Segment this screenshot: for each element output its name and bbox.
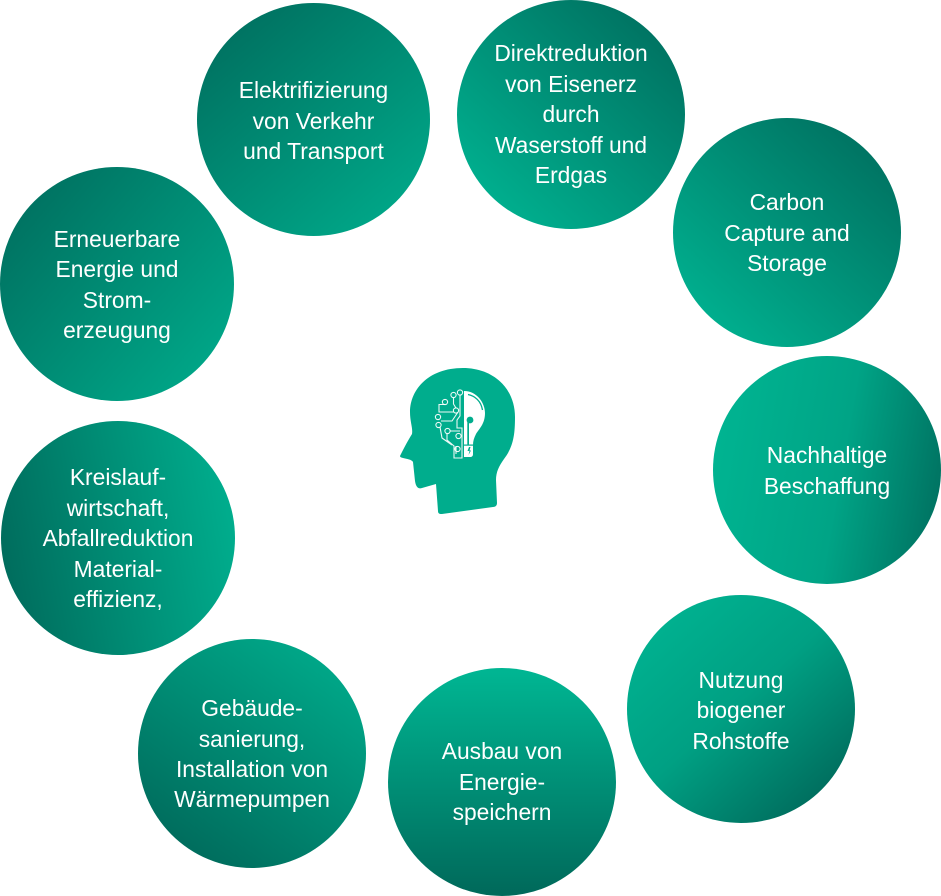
circle: Direktreduktion: durch xyxy=(542,101,600,127)
circle: Nachhaltige Beschaffung xyxy=(713,356,941,584)
circle: Gebäudesanierung: Wärmepumpen xyxy=(174,786,330,812)
circle: Erneuerbare Energie: erzeugung xyxy=(63,317,171,343)
circle: Gebäudesanierung: sanierung, xyxy=(199,726,305,752)
circle: Direktreduktion: Waserstoff und xyxy=(495,132,647,158)
head silhouette xyxy=(400,368,515,514)
circle: Ausbau von Energiespeichern: Ausbau von xyxy=(442,738,562,764)
circle: Ausbau von Energiespeichern: Energie- xyxy=(459,769,545,795)
circle: Kreislaufwirtschaft xyxy=(1,421,235,655)
circle: Elektrifizierung: und Transport xyxy=(243,138,384,164)
circle: Direktreduktion: Direktreduktion xyxy=(494,40,648,66)
circle: Elektrifizierung: von Verkehr xyxy=(253,108,374,134)
circle: Kreislaufwirtschaft: Kreislauf- xyxy=(70,464,166,490)
circle: Nutzung biogener Rohstoffe xyxy=(627,595,855,823)
circle: Erneuerbare Energie: Erneuerbare xyxy=(54,226,180,252)
circle: Direktreduktion: von Eisenerz xyxy=(505,71,637,97)
circle: Erneuerbare Energie: Strom- xyxy=(83,286,151,312)
circle: Carbon Capture: Capture and xyxy=(724,220,850,246)
bulb half xyxy=(464,391,485,457)
circle: Carbon Capture xyxy=(673,118,901,347)
circle: Elektrifizierung: Elektrifizierung xyxy=(239,77,388,103)
circle: Ausbau von Energiespeichern xyxy=(388,668,616,896)
circle: Carbon Capture: Carbon xyxy=(750,189,824,215)
icon: head with circuit and light bulb xyxy=(400,368,515,514)
circle: Ausbau von Energiespeichern: speichern xyxy=(453,799,551,825)
circle: Kreislaufwirtschaft: Material- xyxy=(74,556,162,582)
circle: Direktreduktion xyxy=(457,0,685,229)
circle: Gebäudesanierung xyxy=(138,639,366,868)
circle: Nachhaltige Beschaffung: Nachhaltige xyxy=(767,442,887,468)
circle: Nutzung biogener Rohstoffe: Nutzung xyxy=(699,667,783,693)
circle: Kreislaufwirtschaft: wirtschaft, xyxy=(67,495,169,521)
circle: Gebäudesanierung: Gebäude- xyxy=(201,695,303,721)
circle: Nachhaltige Beschaffung: Beschaffung xyxy=(764,472,890,498)
circle: Elektrifizierung xyxy=(197,3,430,236)
circle: Carbon Capture: Storage xyxy=(747,250,827,276)
circle: Kreislaufwirtschaft: Abfallreduktion xyxy=(43,525,193,551)
circle: Nutzung biogener Rohstoffe: Rohstoffe xyxy=(692,728,790,754)
circle: Gebäudesanierung: Installation von xyxy=(176,756,328,782)
circle: Nutzung biogener Rohstoffe: biogener xyxy=(697,697,785,723)
circuit half xyxy=(435,390,463,458)
circle: Direktreduktion: Erdgas xyxy=(535,162,607,188)
circle: Erneuerbare Energie: Energie und xyxy=(56,256,178,282)
circle: Erneuerbare Energie xyxy=(0,167,234,401)
circle: Kreislaufwirtschaft: effizienz, xyxy=(73,586,163,612)
